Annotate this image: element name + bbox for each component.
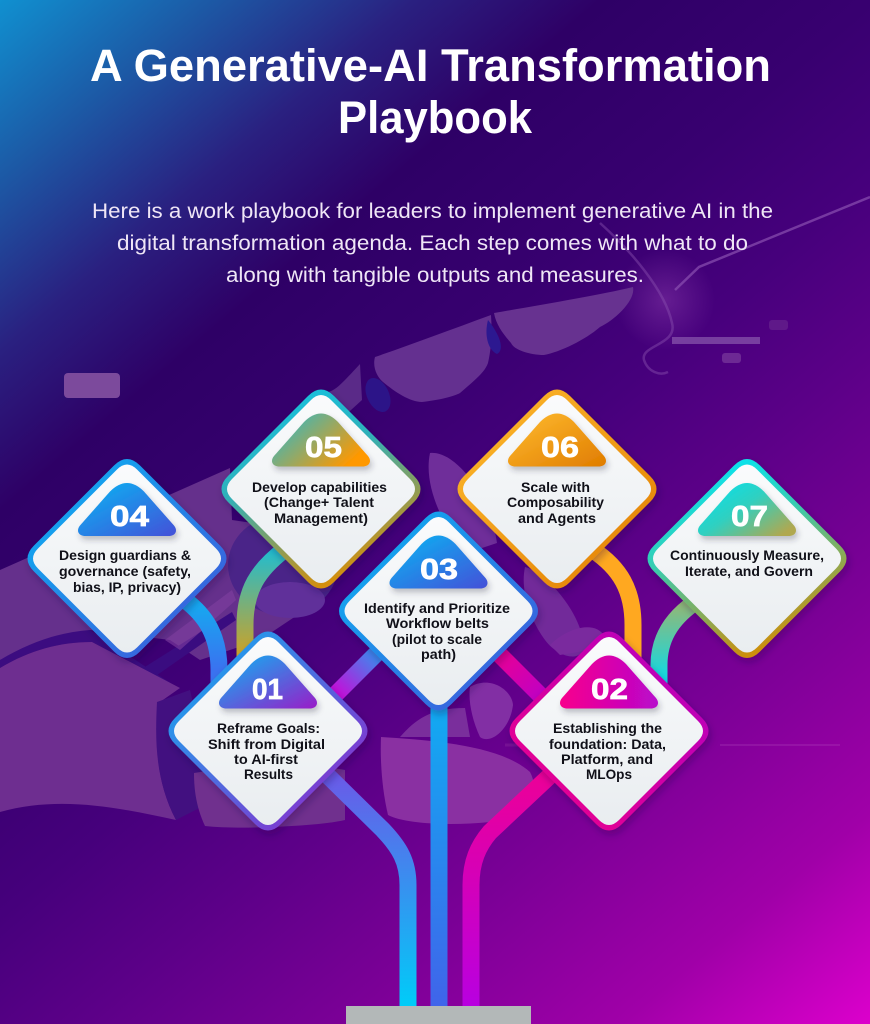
label 07 (670, 548, 824, 579)
number 05: 05 (305, 432, 342, 464)
label 02 (549, 721, 666, 782)
step 01 card (168, 632, 368, 830)
step 05 card (222, 390, 420, 588)
badge 06 (508, 414, 606, 466)
badge 01 (219, 656, 317, 708)
label 05: (Change+ Talent (264, 495, 375, 510)
number 02: 02 (591, 674, 628, 706)
trunk: centre stem to 03 (430, 700, 448, 1008)
badge 04 (78, 483, 176, 536)
label 01: Reframe Goals: (217, 721, 320, 736)
tree branches (185, 550, 694, 1008)
step 07 card (648, 459, 846, 658)
branch: 03 to 02 (490, 645, 555, 710)
label 02: Establishing the (553, 721, 663, 736)
badge 07 (698, 483, 796, 536)
label 02: MLOps (586, 767, 632, 782)
number 04: 04 (110, 501, 149, 533)
label 03: Identify and Prioritize (364, 601, 511, 616)
intro text (92, 200, 773, 287)
label 04: governance (safety, (59, 564, 191, 579)
label 04: bias, IP, privacy) (73, 580, 181, 595)
label 02: foundation: Data, (549, 737, 666, 752)
label 03: path) (421, 647, 456, 662)
title: Playbook (338, 92, 533, 143)
label 05: Develop capabilities (252, 480, 387, 495)
step 06 card (458, 390, 656, 588)
label 04: Design guardians & (59, 548, 191, 563)
label 03: (pilot to scale (392, 632, 483, 647)
label 01: Results (244, 767, 293, 782)
number 07: 07 (731, 501, 768, 533)
label 05 (252, 480, 387, 526)
branch: 07 to 02 (659, 603, 694, 705)
intro text: along with tangible outputs and measures. (226, 264, 644, 287)
label 03 (364, 601, 511, 662)
number 01: 01 (252, 674, 283, 706)
intro text: Here is a work playbook for leaders to implement generative AI in the (92, 200, 773, 223)
trunk base (346, 1006, 531, 1024)
branch: 03 to 01 (325, 645, 385, 705)
label 02: Platform, and (561, 752, 653, 767)
step 03 card (339, 512, 538, 710)
label 07: Continuously Measure, (670, 548, 824, 563)
trunk: left stem to 01 (322, 770, 408, 1008)
step 04 card (28, 459, 226, 658)
label 06 (507, 480, 605, 526)
badge 03 (390, 536, 488, 588)
label 01: to AI-first (234, 752, 299, 767)
branch: 06 to 02 (593, 550, 633, 680)
badge 02 (560, 656, 658, 708)
branch: 05 to 01 (245, 550, 284, 680)
label 01 (208, 721, 325, 782)
label 06: Scale with (521, 480, 590, 495)
branch: 04 to 01 (185, 600, 219, 695)
intro text: digital transformation agenda. Each step comes with what to do (117, 232, 748, 255)
label 06: Composability (507, 495, 605, 510)
label 04 (59, 548, 191, 595)
number 06: 06 (541, 432, 579, 464)
number 03: 03 (420, 554, 458, 586)
label 07: Iterate, and Govern (685, 564, 813, 579)
label 01: Shift from Digital (208, 737, 325, 752)
title (90, 40, 771, 143)
step 02 card (510, 632, 708, 830)
trunk: right stem to 02 (471, 770, 556, 1008)
label 05: Management) (274, 511, 368, 526)
background: robot and human hands (0, 197, 870, 828)
title: A Generative-AI Transformation (90, 40, 771, 91)
badge 05 (272, 414, 370, 466)
label 06: and Agents (518, 511, 596, 526)
label 03: Workflow belts (386, 616, 489, 631)
